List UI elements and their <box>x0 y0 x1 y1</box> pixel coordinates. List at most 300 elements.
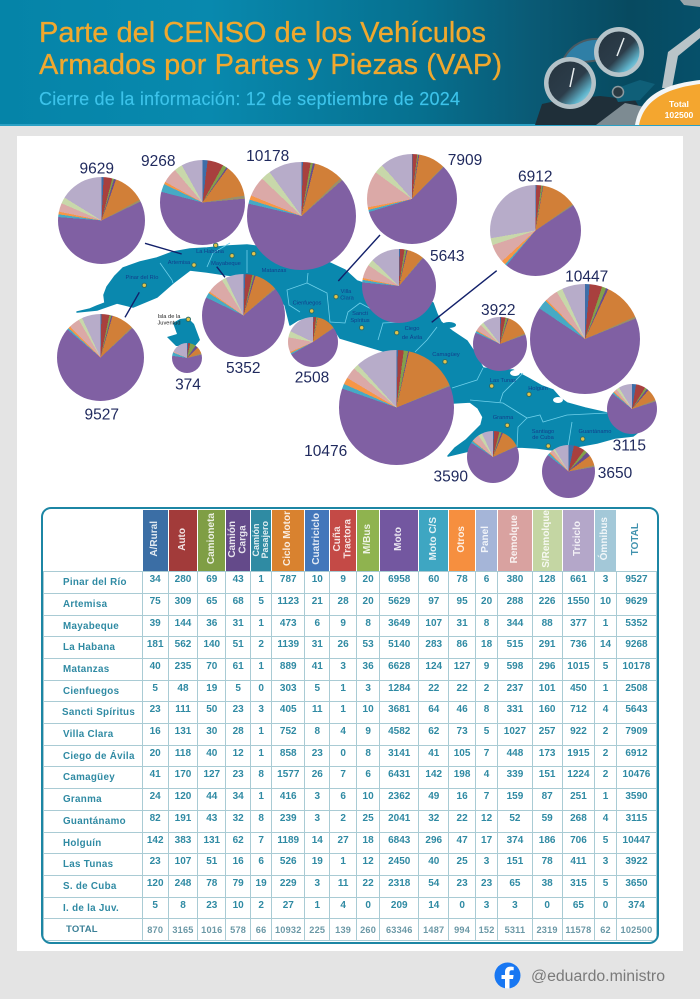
row: Las Tunas: Las Tunas <box>63 859 113 870</box>
row: Holguín: 706 <box>570 835 587 846</box>
row: TOTAL: 1487 <box>423 925 444 935</box>
row: Camagüey: 339 <box>507 769 523 780</box>
row: Holguín <box>63 835 650 849</box>
row: Ciego de Ávila: 20 <box>150 748 161 759</box>
row: I. de la Juv.: 374 <box>628 900 645 911</box>
row: Artemisa: 95 <box>457 596 468 607</box>
row: I. de la Juv.: 2 <box>258 900 264 911</box>
row: TOTAL: 11578 <box>565 925 591 935</box>
row: Guantánamo: 12 <box>481 813 492 824</box>
province names: Las Tunas <box>490 378 516 384</box>
row: S. de Cuba: 23 <box>457 878 468 889</box>
row: Matanzas: Matanzas <box>63 664 110 675</box>
province names: Artemisa <box>168 260 191 266</box>
row: Las Tunas: 3 <box>484 856 489 867</box>
table header: A/Rural <box>149 521 160 557</box>
row: Cienfuegos: Cienfuegos <box>63 686 119 697</box>
row: Granma: 10 <box>363 791 374 802</box>
row: I. de la Juv.: 23 <box>206 900 217 911</box>
row: Granma: 3590 <box>625 791 648 802</box>
row: Villa Clara <box>63 726 648 740</box>
row: TOTAL: TOTAL <box>66 924 98 935</box>
row: Holguín: 186 <box>539 835 555 846</box>
row: Pinar del Río: 60 <box>428 574 439 585</box>
province names: Matanzas <box>262 268 286 274</box>
row: Granma: 34 <box>233 791 244 802</box>
row: Mayabeque: 31 <box>457 618 468 629</box>
pie value labels: 10476 <box>304 443 347 460</box>
province names: Villa <box>341 289 352 295</box>
row: Las Tunas <box>63 856 648 870</box>
row: Villa Clara: Villa Clara <box>63 729 114 740</box>
row: Cienfuegos: 0 <box>258 683 264 694</box>
province names: de Ávila <box>402 334 423 341</box>
row: Ciego de Ávila: 40 <box>206 748 217 759</box>
data table <box>41 507 659 944</box>
row: I. de la Juv.: 3 <box>484 900 489 911</box>
row: TOTAL: 62 <box>600 925 611 935</box>
row: TOTAL: 1016 <box>201 925 222 935</box>
row: La Habana: 86 <box>457 639 468 650</box>
row: Artemisa: 309 <box>175 596 191 607</box>
row: La Habana: 283 <box>425 639 442 650</box>
row: Matanzas: 61 <box>233 661 244 672</box>
table header: Camión <box>227 521 238 557</box>
row: Artemisa: 65 <box>206 596 217 607</box>
row: Ciego de Ávila: 118 <box>175 748 191 759</box>
row: Pinar del Río: 3 <box>603 574 608 585</box>
row: Villa Clara: 9 <box>365 726 371 737</box>
row: Mayabeque: 36 <box>206 618 217 629</box>
row: Matanzas: 296 <box>539 661 555 672</box>
row: Matanzas: 1015 <box>567 661 590 672</box>
row: Granma: 3 <box>314 791 320 802</box>
row: I. de la Juv.: 209 <box>391 900 408 911</box>
row: Cienfuegos: 1 <box>340 683 346 694</box>
row: TOTAL: 870 <box>147 925 163 935</box>
row: Holguín: 47 <box>457 835 468 846</box>
row: Sancti Spíritus: 5643 <box>625 704 648 715</box>
row: Mayabeque: 31 <box>233 618 244 629</box>
row: Matanzas: 889 <box>280 661 297 672</box>
total badge <box>635 80 700 125</box>
row: Mayabeque <box>63 618 648 632</box>
row: Granma: 159 <box>507 791 523 802</box>
row: Holguín: 17 <box>481 835 492 846</box>
row: Granma: 49 <box>428 791 439 802</box>
row: Guantánamo: 43 <box>206 813 217 824</box>
row: Mayabeque: 3649 <box>388 618 410 629</box>
pie value labels: 374 <box>175 376 201 394</box>
row: Sancti Spíritus <box>62 704 648 718</box>
row: Holguín: 142 <box>147 835 164 846</box>
row: Artemisa: 226 <box>539 596 555 607</box>
row: La Habana: 562 <box>175 639 191 650</box>
row: Ciego de Ávila: 1915 <box>567 748 590 759</box>
table header: Pasajero <box>260 521 270 558</box>
row: S. de Cuba: 3650 <box>625 878 648 889</box>
row: S. de Cuba: 54 <box>428 878 439 889</box>
row: Granma: 1 <box>603 791 608 802</box>
title: Armados por Partes y Piezas (VAP) <box>39 49 502 81</box>
table header <box>44 510 656 935</box>
row: Ciego de Ávila: 12 <box>233 748 244 759</box>
table header: Camión <box>251 523 261 556</box>
row: Camagüey <box>63 769 650 783</box>
province names: Sancti <box>352 311 368 317</box>
row: Camagüey: 1224 <box>567 769 590 780</box>
row: Holguín: 7 <box>258 835 264 846</box>
row: S. de Cuba: 315 <box>570 878 587 889</box>
row: Granma: 44 <box>206 791 217 802</box>
row: Cienfuegos: 1 <box>603 683 608 694</box>
row: Camagüey: 6431 <box>388 769 410 780</box>
row: Mayabeque: 88 <box>542 618 553 629</box>
row: S. de Cuba: 38 <box>542 878 553 889</box>
row: Holguín: Holguín <box>63 838 102 849</box>
row: Villa Clara: 7909 <box>625 726 648 737</box>
row: Las Tunas: 23 <box>150 856 161 867</box>
row: Sancti Spíritus: 4 <box>603 704 608 715</box>
row: Holguín: 5 <box>603 835 608 846</box>
row: Ciego de Ávila: 6912 <box>625 748 648 759</box>
row: Guantánamo: 32 <box>428 813 439 824</box>
row: S. de Cuba: 11 <box>338 878 348 889</box>
row: Las Tunas: 107 <box>175 856 191 867</box>
title <box>39 17 502 81</box>
row: Artemisa: 1123 <box>277 596 299 607</box>
row: Camagüey: 7 <box>340 769 346 780</box>
row: Granma: 1 <box>258 791 264 802</box>
row: Camagüey: Camagüey <box>63 772 115 783</box>
map of Cuba <box>77 243 637 456</box>
row: TOTAL: 5311 <box>505 925 525 935</box>
row: Mayabeque: 473 <box>280 618 297 629</box>
table header: Camioneta <box>206 513 217 564</box>
row: Villa Clara: 5 <box>484 726 489 737</box>
row: Villa Clara: 1 <box>258 726 264 737</box>
row: Pinar del Río: 128 <box>539 574 555 585</box>
row: Artemisa: 20 <box>481 596 492 607</box>
row: Pinar del Río: Pinar del Río <box>63 577 127 588</box>
province names: Isla de la <box>158 314 181 320</box>
table header: Panel <box>480 526 491 552</box>
row: Sancti Spíritus: 3 <box>258 704 264 715</box>
row: Pinar del Río: 10 <box>312 574 323 585</box>
row: Ciego de Ávila: 3141 <box>388 748 410 759</box>
row: TOTAL: 10932 <box>275 925 302 935</box>
pie: Isla de la Juventud 374 <box>172 343 202 373</box>
pie value labels <box>79 148 646 486</box>
row: Cienfuegos <box>63 683 648 697</box>
row: Guantánamo: 2 <box>340 813 346 824</box>
row: La Habana: 31 <box>312 639 323 650</box>
row: Mayabeque: 1 <box>603 618 608 629</box>
row: Las Tunas: 16 <box>233 856 244 867</box>
row: Artemisa: 288 <box>507 596 523 607</box>
row: Camagüey: 23 <box>233 769 244 780</box>
row: TOTAL: 2319 <box>536 925 558 935</box>
row: Sancti Spíritus: 11 <box>312 704 323 715</box>
row: Matanzas: 10178 <box>623 661 650 672</box>
row: TOTAL: 578 <box>230 925 246 935</box>
row: TOTAL: 260 <box>360 925 376 935</box>
row: S. de Cuba: 79 <box>233 878 244 889</box>
row: Granma: 2362 <box>388 791 410 802</box>
row: Villa Clara: 73 <box>457 726 468 737</box>
row: Holguín: 383 <box>175 835 191 846</box>
row: La Habana: La Habana <box>63 642 115 653</box>
pie: Matanzas 10178 <box>247 162 356 270</box>
row: Guantánamo: 2041 <box>388 813 410 824</box>
row: Pinar del Río: 787 <box>280 574 297 585</box>
row: La Habana <box>63 639 648 653</box>
table header: Tractora <box>342 519 353 559</box>
row: Pinar del Río: 1 <box>258 574 264 585</box>
row: Cienfuegos: 5 <box>235 683 241 694</box>
row: Pinar del Río: 69 <box>206 574 217 585</box>
row: Guantánamo: 239 <box>280 813 297 824</box>
row: Pinar del Río: 661 <box>570 574 587 585</box>
row: TOTAL: 139 <box>335 925 351 935</box>
row: Mayabeque: Mayabeque <box>63 621 119 632</box>
table header: S/Remolque <box>541 510 552 568</box>
row: Sancti Spíritus: 8 <box>484 704 489 715</box>
leader lines <box>125 235 497 322</box>
row: Ciego de Ávila <box>63 748 648 762</box>
row: TOTAL: 63346 <box>386 925 413 935</box>
pie value labels: 10447 <box>565 268 608 286</box>
row: S. de Cuba: 5 <box>603 878 608 889</box>
row: Las Tunas: 78 <box>542 856 553 867</box>
row: Cienfuegos: 5 <box>152 683 158 694</box>
row: La Habana: 181 <box>147 639 164 650</box>
table header: Cuña <box>332 526 343 551</box>
row: Sancti Spíritus: Sancti Spíritus <box>62 707 135 718</box>
row: Pinar del Río: 380 <box>507 574 523 585</box>
row: Cienfuegos: 5 <box>314 683 320 694</box>
row: Pinar del Río: 9527 <box>625 574 648 585</box>
table header: Carga <box>237 525 248 553</box>
province names: Cienfuegos <box>293 300 322 306</box>
row: Las Tunas: 411 <box>570 856 586 867</box>
row: I. de la Juv.: 0 <box>365 900 371 911</box>
row: Matanzas: 70 <box>206 661 217 672</box>
row: Pinar del Río: 9 <box>340 574 346 585</box>
row: S. de Cuba: 120 <box>147 878 164 889</box>
row: Artemisa: 97 <box>428 596 439 607</box>
row: Guantánamo: 191 <box>175 813 191 824</box>
row: Artemisa: 5 <box>258 596 264 607</box>
row: S. de Cuba: 22 <box>363 878 374 889</box>
row: Camagüey: 8 <box>258 769 264 780</box>
pie: Villa Clara 7909 <box>367 154 457 244</box>
pie value labels: 3590 <box>433 468 468 486</box>
row: Matanzas: 1 <box>258 661 264 672</box>
row: Mayabeque: 8 <box>365 618 371 629</box>
row: Mayabeque: 377 <box>570 618 587 629</box>
row: Sancti Spíritus: 712 <box>570 704 587 715</box>
row: Artemisa: Artemisa <box>63 599 107 610</box>
row: Matanzas: 36 <box>363 661 374 672</box>
row: Artemisa: 5629 <box>388 596 410 607</box>
row: Cienfuegos: 1284 <box>388 683 410 694</box>
table header: Auto <box>177 528 188 550</box>
row: Matanzas: 41 <box>312 661 323 672</box>
row: Camagüey: 10476 <box>623 769 650 780</box>
province borders <box>160 243 607 447</box>
row: Matanzas: 6628 <box>388 661 410 672</box>
table header: Otros <box>456 526 467 552</box>
row: I. de la Juv.: 0 <box>459 900 465 911</box>
province names: Granma <box>493 415 514 421</box>
row: Pinar del Río <box>63 574 648 588</box>
pie value labels: 9268 <box>141 153 176 170</box>
row: Guantánamo: 3115 <box>626 813 647 824</box>
row: Las Tunas: 51 <box>206 856 217 867</box>
row: Pinar del Río: 6958 <box>388 574 410 585</box>
row: Guantánamo: 4 <box>603 813 608 824</box>
row: Mayabeque: 144 <box>175 618 191 629</box>
row: Las Tunas: 151 <box>507 856 523 867</box>
row: Villa Clara: 4582 <box>388 726 410 737</box>
row: Guantánamo: 32 <box>233 813 244 824</box>
row: TOTAL <box>66 924 652 935</box>
row: Ciego de Ávila: Ciego de Ávila <box>63 751 135 762</box>
row: S. de Cuba: 3 <box>314 878 320 889</box>
row: S. de Cuba: 2318 <box>388 878 410 889</box>
row: Ciego de Ávila: 8 <box>365 748 371 759</box>
row: Villa Clara: 62 <box>428 726 439 737</box>
row: Las Tunas: 6 <box>258 856 264 867</box>
row: Pinar del Río: 78 <box>457 574 468 585</box>
row: Ciego de Ávila: 0 <box>340 748 346 759</box>
row: Sancti Spíritus: 111 <box>175 704 191 715</box>
pie: Cienfuegos 2508 <box>288 317 338 367</box>
table header: Ómnibus <box>599 517 610 561</box>
row: Cienfuegos: 303 <box>280 683 297 694</box>
row: Artemisa: 21 <box>312 596 323 607</box>
icon: facebook <box>494 962 520 988</box>
row: Mayabeque: 107 <box>425 618 442 629</box>
row: Artemisa <box>63 596 648 610</box>
row: Guantánamo: 3 <box>314 813 320 824</box>
row: La Habana: 9268 <box>625 639 648 650</box>
row: S. de Cuba: 65 <box>509 878 520 889</box>
pie value labels: 3650 <box>598 465 633 482</box>
row: Guantánamo: 268 <box>570 813 587 824</box>
row: Matanzas: 235 <box>175 661 191 672</box>
row: Ciego de Ávila: 858 <box>280 748 297 759</box>
row: Cienfuegos: 237 <box>507 683 523 694</box>
row: Matanzas: 127 <box>454 661 470 672</box>
row: Las Tunas: 1 <box>340 856 346 867</box>
row: TOTAL: 66 <box>256 925 266 935</box>
row: La Habana: 291 <box>539 639 555 650</box>
province names: Mayabeque <box>211 261 241 267</box>
pie value labels: 7909 <box>448 152 482 169</box>
panel: white content card <box>17 136 683 951</box>
province names: Santiago <box>532 429 554 435</box>
row: Granma: 416 <box>280 791 297 802</box>
row: Villa Clara: 28 <box>233 726 244 737</box>
row: Ciego de Ávila: 105 <box>454 748 470 759</box>
pie: Artemisa 9629 <box>58 177 145 264</box>
pie: Holguín 10447 <box>530 284 640 394</box>
row: Villa Clara: 257 <box>539 726 555 737</box>
row: La Habana: 2 <box>258 639 264 650</box>
row: Camagüey: 127 <box>203 769 220 780</box>
row: Granma: 6 <box>340 791 346 802</box>
row: Camagüey: 198 <box>454 769 470 780</box>
row: Villa Clara: 8 <box>314 726 320 737</box>
row: TOTAL: 994 <box>454 925 470 935</box>
pie: Sancti Spíritus 5643 <box>362 249 436 323</box>
row: Artemisa: 1550 <box>567 596 590 607</box>
row: Cienfuegos: 101 <box>539 683 555 694</box>
pie: Granma 3590 <box>467 431 519 483</box>
row: Holguín: 62 <box>233 835 244 846</box>
row: I. de la Juv.: 27 <box>283 900 294 911</box>
row: Camagüey: 4 <box>484 769 489 780</box>
row: Las Tunas: 3922 <box>625 856 648 867</box>
table header: Moto C/S <box>428 517 438 561</box>
row: Granma: 87 <box>542 791 553 802</box>
row: TOTAL: 3165 <box>172 925 194 935</box>
table header: M/Bus <box>362 524 373 554</box>
row: Ciego de Ávila: 1 <box>258 748 264 759</box>
row: I. de la Juv.: 65 <box>573 900 584 911</box>
row: Villa Clara: 752 <box>280 726 297 737</box>
row: Artemisa: 20 <box>363 596 374 607</box>
table header: Cuatriciclo <box>311 513 322 565</box>
row: Camagüey: 170 <box>175 769 191 780</box>
row: I. de la Juv.: 4 <box>340 900 346 911</box>
row: Las Tunas: 25 <box>457 856 468 867</box>
row: Holguín: 10447 <box>623 835 650 846</box>
row: S. de Cuba: S. de Cuba <box>63 881 117 892</box>
row: Artemisa: 28 <box>338 596 349 607</box>
total badge: 102500 <box>665 110 694 120</box>
row: Holguín: 374 <box>507 835 523 846</box>
row: Cienfuegos: 48 <box>177 683 189 694</box>
pie: Ciego de Ávila 6912 <box>490 185 581 276</box>
row: Holguín: 27 <box>338 835 349 846</box>
row: Villa Clara: 16 <box>150 726 161 737</box>
pie: Las Tunas 3922 <box>473 317 527 371</box>
row: S. de Cuba <box>63 878 648 892</box>
row: Ciego de Ávila: 41 <box>428 748 439 759</box>
row: Ciego de Ávila: 2 <box>603 748 608 759</box>
row: S. de Cuba: 229 <box>280 878 297 889</box>
row: TOTAL: 102500 <box>621 925 652 935</box>
row: Artemisa: 10 <box>600 596 611 607</box>
pie value labels: 6912 <box>518 168 553 186</box>
row: Camagüey: 41 <box>150 769 161 780</box>
row: Ciego de Ávila: 23 <box>312 748 323 759</box>
row: Villa Clara: 131 <box>175 726 191 737</box>
row: Las Tunas: 12 <box>363 856 374 867</box>
row: Matanzas: 5 <box>603 661 608 672</box>
row: Guantánamo: 22 <box>457 813 468 824</box>
row: Granma: 24 <box>150 791 161 802</box>
row: Guantánamo: 82 <box>150 813 161 824</box>
table header: Ciclo Motor <box>282 511 293 566</box>
row: S. de Cuba: 23 <box>481 878 492 889</box>
row: Mayabeque: 9 <box>340 618 346 629</box>
row: Holguín: 131 <box>203 835 220 846</box>
row: I. de la Juv.: I. de la Juv. <box>63 903 119 914</box>
